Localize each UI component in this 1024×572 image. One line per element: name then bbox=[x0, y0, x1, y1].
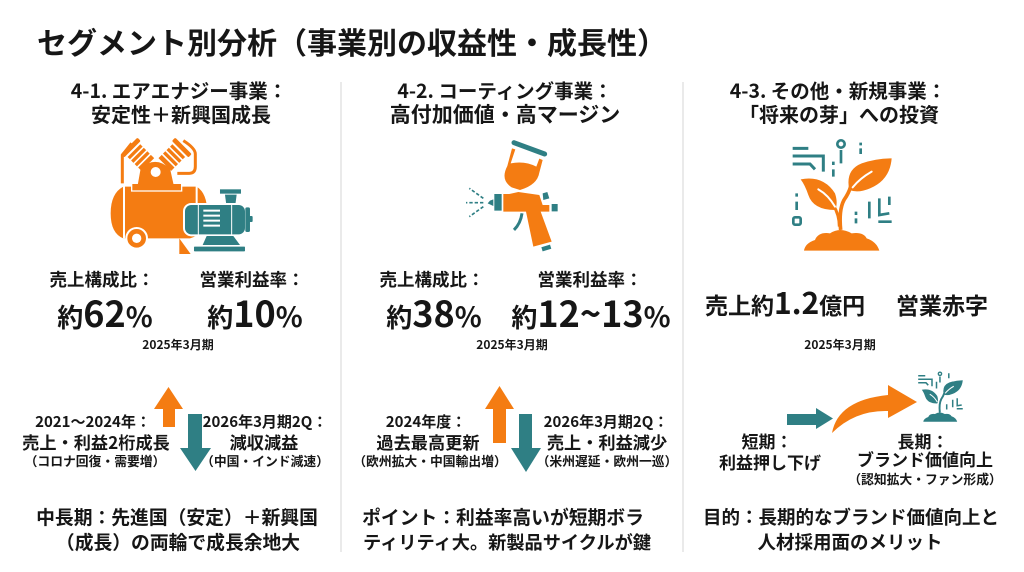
heading: air energy: 安定性＋新興国成長 bbox=[91, 99, 271, 128]
period note: 2025年3月期 bbox=[142, 336, 214, 353]
text: growth period: （コロナ回復・需要増） bbox=[25, 451, 165, 470]
stat: sales share: 売上構成比： bbox=[380, 267, 484, 292]
heading: air energy: 4-1. エアエナジー事業： bbox=[71, 75, 287, 104]
stat: operating margin: 約10% bbox=[207, 286, 303, 338]
stat: sales share bbox=[50, 267, 154, 338]
text: short term: 短期： bbox=[742, 428, 792, 453]
stat: sales and loss bbox=[705, 279, 988, 323]
arrow: up bbox=[485, 386, 514, 443]
text: record period: 過去最高更新 bbox=[376, 429, 480, 454]
arrow: down bbox=[511, 414, 541, 472]
icon: spray gun bbox=[466, 143, 558, 249]
arrow: down bbox=[180, 414, 211, 471]
heading: air energy bbox=[71, 75, 287, 128]
text: growth period bbox=[22, 411, 170, 470]
arrow: up bbox=[154, 387, 183, 427]
stat: operating margin: 営業利益率： bbox=[538, 267, 642, 292]
panel: other and new business bbox=[703, 75, 1002, 555]
takeaway: ポイント：利益率高いが短期ボラ bbox=[362, 503, 644, 530]
heading: coating bbox=[390, 75, 620, 129]
text: long term bbox=[848, 428, 1002, 488]
takeaway: 人材採用面のメリット bbox=[757, 529, 943, 555]
text: growth period: 売上・利益2桁成長 bbox=[22, 429, 170, 454]
takeaway: （成長）の両輪で成長余地大 bbox=[56, 528, 300, 555]
icon: air compressor bbox=[111, 138, 253, 254]
text: record period bbox=[353, 411, 507, 470]
period note: 2025年3月期 bbox=[804, 336, 876, 353]
arrow: short term bbox=[787, 408, 833, 429]
text: decline period: 減収減益 bbox=[230, 429, 298, 454]
stat: sales share: 売上構成比： bbox=[50, 267, 154, 292]
stat: operating margin: 営業利益率： bbox=[200, 267, 304, 292]
text: record period: 2024年度： bbox=[386, 411, 466, 432]
text: long term: （認知拡大・ファン形成） bbox=[848, 469, 1002, 488]
heading: new business: 4-3. その他・新規事業： bbox=[730, 75, 946, 104]
text: long term: ブランド価値向上 bbox=[857, 446, 993, 471]
period note: 2025年3月期 bbox=[476, 336, 548, 353]
title: セグメント別分析（事業別の収益性・成長性） bbox=[37, 19, 667, 63]
takeaway: 目的：長期的なブランド価値向上と bbox=[703, 504, 999, 530]
heading: coating: 高付加価値・高マージン bbox=[390, 99, 620, 129]
icon: small sprout bbox=[918, 372, 963, 422]
heading: new business bbox=[730, 75, 946, 128]
arrow: long term bbox=[832, 385, 917, 433]
takeaway bbox=[703, 504, 999, 555]
heading: new business: 「将来の芽」への投資 bbox=[739, 99, 939, 128]
text: decline period: 2026年3月期2Q： bbox=[544, 411, 668, 432]
text: decline period bbox=[201, 411, 329, 470]
takeaway bbox=[362, 503, 651, 555]
panel: coating bbox=[353, 75, 677, 555]
stat: sales share bbox=[380, 267, 484, 338]
heading: coating: 4-2. コーティング事業： bbox=[397, 75, 613, 104]
stat: sales and loss: 営業赤字 bbox=[896, 287, 988, 321]
text: decline period: 2026年3月期2Q： bbox=[203, 411, 327, 432]
stat: sales and loss: 売上約1.2億円 bbox=[705, 279, 865, 323]
text: decline period: （中国・インド減速） bbox=[201, 451, 329, 470]
text: decline period: （米州遅延・欧州一巡） bbox=[537, 451, 677, 470]
icon: sprout with circuits bbox=[793, 140, 892, 251]
text: decline period bbox=[537, 411, 677, 470]
stat: sales share: 約38% bbox=[386, 286, 482, 338]
text: short term: 利益押し下げ bbox=[719, 449, 821, 474]
text: short term bbox=[719, 428, 821, 474]
stat: operating margin: 約12~13% bbox=[511, 286, 671, 338]
takeaway bbox=[36, 503, 318, 555]
text: decline period: 売上・利益減少 bbox=[547, 429, 667, 454]
stat: operating margin bbox=[200, 267, 304, 338]
text: record period: （欧州拡大・中国輸出増） bbox=[353, 451, 507, 470]
text: long term: 長期： bbox=[898, 428, 948, 453]
text: growth period: 2021～2024年： bbox=[35, 411, 151, 432]
stat: sales share: 約62% bbox=[57, 286, 153, 338]
panel: air energy bbox=[22, 75, 329, 555]
takeaway: ティリティ大。新製品サイクルが鍵 bbox=[363, 529, 651, 555]
takeaway: 中長期：先進国（安定）＋新興国 bbox=[36, 503, 318, 530]
